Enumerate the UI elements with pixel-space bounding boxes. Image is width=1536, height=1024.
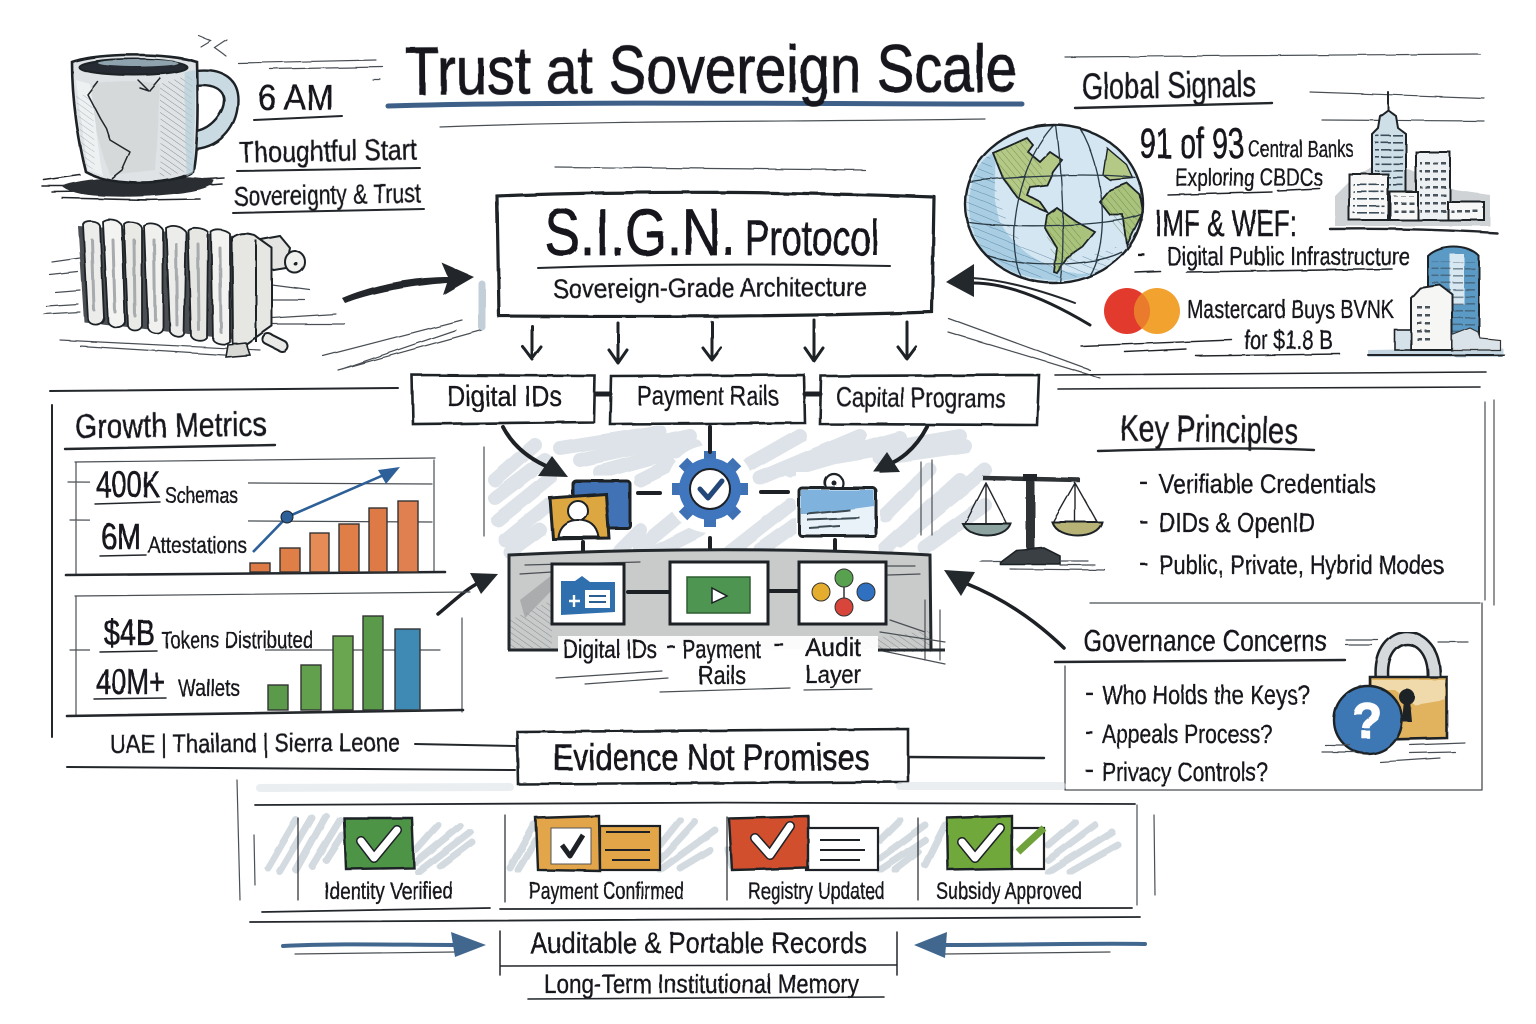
icon: radiator <box>44 220 345 357</box>
card: identity verified: Identity Verified <box>324 878 453 905</box>
list: concerns: - <box>1085 716 1094 746</box>
icon: mastercard logo <box>1104 288 1180 334</box>
icon: city skyline <box>1330 92 1497 233</box>
heading: governance concerns: Governance Concerns <box>1083 623 1327 658</box>
box: Digital IDs <box>412 375 595 424</box>
heading: global signals: Global Signals <box>1082 64 1256 107</box>
card: registry updated: Registry Updated <box>748 878 885 905</box>
heading: S.I.G.N. Protocol: Protocol <box>745 210 879 266</box>
text: IMF and WEF <box>1135 203 1410 272</box>
text: IMF and WEF: Digital Public Infrastructure <box>1167 241 1410 271</box>
thin verticals around central icons <box>484 447 932 536</box>
chart: tokens and wallets <box>67 592 470 716</box>
list: principles <box>1139 466 1444 580</box>
decorative wash under evidence <box>260 786 1062 788</box>
panel: key principles <box>963 372 1494 605</box>
labels: architecture layer: Audit <box>805 632 862 662</box>
arrow: radiator to protocol <box>342 263 474 303</box>
heading: evidence not promises <box>517 729 1044 784</box>
connector strokes around central icons <box>583 427 835 555</box>
list: concerns: Appeals Process? <box>1102 719 1272 749</box>
card: payment confirmed <box>505 815 715 905</box>
list: principles: - <box>1139 505 1148 535</box>
list: concerns <box>1085 677 1310 787</box>
text: mastercard buys BVNK: for $1.8 B <box>1244 325 1333 355</box>
chart: schemas and attestations: Attestations <box>148 532 247 558</box>
text: thoughtful start: Thoughtful Start <box>239 133 418 170</box>
chart: schemas and attestations: Schemas <box>165 482 238 508</box>
icon: padlock with question mark <box>1322 638 1468 762</box>
heading: S.I.G.N. Protocol: S.I.G.N. <box>544 195 736 269</box>
list: principles: Verifiable Credentials <box>1159 469 1376 499</box>
icon: blue gear with check <box>666 445 754 533</box>
chart: tokens and wallets: $4B <box>104 612 155 653</box>
list: principles: - <box>1139 466 1148 496</box>
labels: architecture layer: Digital IDs <box>563 634 657 664</box>
icon: padlock with question mark: ? <box>1352 693 1382 749</box>
list: principles: DIDs & OpenID <box>1159 507 1315 538</box>
card: audit layer <box>799 562 886 624</box>
text: mastercard buys BVNK <box>1081 294 1394 356</box>
connector strokes between pillars <box>596 392 820 396</box>
heading: growth metrics: Growth Metrics <box>75 406 267 446</box>
panel: growth metrics <box>50 388 515 770</box>
box: Capital Programs <box>820 375 1039 425</box>
footer: institutional memory: Long-Term Institutional Memory <box>544 969 859 999</box>
box: Digital IDs: Digital IDs <box>447 381 562 413</box>
chart: schemas and attestations: 400K <box>96 464 160 505</box>
list: concerns: - <box>1085 677 1094 707</box>
card: registry updated <box>727 816 925 905</box>
title <box>388 30 1022 127</box>
decorative strokes under protocol arrows <box>323 284 1100 378</box>
card: payment rails <box>670 562 768 624</box>
chart: tokens and wallets: Tokens Distributed <box>161 627 313 654</box>
labels: architecture layer: Payment <box>682 634 762 664</box>
text: mastercard buys BVNK: Mastercard Buys BVNK <box>1187 294 1394 324</box>
text: sovereignty and trust: Sovereignty & Trust <box>234 177 421 212</box>
text: central banks <box>1140 120 1354 195</box>
arrow: concerns to architecture <box>944 570 1064 648</box>
card: digital IDs <box>552 564 624 624</box>
heading: evidence not promises: Evidence Not Promises <box>553 737 870 778</box>
box: Payment Rails <box>610 375 805 424</box>
panel: governance concerns <box>1055 603 1482 790</box>
arrows: protocol down to pillars <box>523 320 916 363</box>
labels: architecture layer <box>556 628 878 696</box>
arrow: metrics to architecture <box>438 573 498 614</box>
icon: balance scale <box>963 474 1105 570</box>
arrow: globe to protocol <box>946 264 1090 325</box>
arrow: digital ids to icon <box>503 427 568 477</box>
text: central banks: Central Banks <box>1248 136 1354 163</box>
arrow: blue left <box>283 932 486 957</box>
text: countries: UAE | Thailand | Sierra Leone <box>110 727 400 759</box>
card: subsidy approved <box>918 816 1118 905</box>
text: 6 AM: 6 AM <box>258 77 334 118</box>
text: central banks: 91 of 93 <box>1140 120 1244 168</box>
list: concerns: Privacy Controls? <box>1102 757 1268 787</box>
text: IMF and WEF: - <box>1137 238 1146 268</box>
list: principles: - <box>1139 547 1148 577</box>
list: principles: Public, Private, Hybrid Modes <box>1159 550 1444 580</box>
list: concerns: Who Holds the Keys? <box>1102 680 1310 710</box>
text: sovereign-grade architecture: Sovereign-Grade Architecture <box>553 272 867 304</box>
icon: bank buildings <box>1368 247 1504 357</box>
heading: key principles: Key Principles <box>1120 407 1298 452</box>
text: auditable records: Auditable & Portable Records <box>530 927 867 960</box>
card: subsidy approved: Subsidy Approved <box>936 878 1082 905</box>
card: identity verified <box>268 816 472 905</box>
text: central banks: Exploring CBDCs <box>1175 164 1323 192</box>
labels: architecture layer: - <box>666 630 676 660</box>
labels: architecture layer: - <box>773 628 785 658</box>
box: Payment Rails: Payment Rails <box>637 380 779 411</box>
icon: globe <box>965 125 1143 283</box>
icon: coffee mug <box>42 36 238 200</box>
card: payment confirmed: Payment Confirmed <box>529 878 684 905</box>
icon: badge <box>796 472 880 540</box>
panel: architecture layer <box>508 550 945 664</box>
labels: architecture layer: Layer <box>805 659 861 689</box>
title: Trust at Sovereign Scale <box>405 30 1017 110</box>
labels: architecture layer: Rails <box>698 660 746 690</box>
panel: evidence cards <box>237 780 1155 922</box>
text: IMF and WEF: IMF & WEF: <box>1155 203 1297 244</box>
icon: identity cards <box>550 476 634 539</box>
decorative top strokes <box>238 54 1484 170</box>
footer: records <box>500 927 897 975</box>
chart: schemas and attestations <box>66 458 445 575</box>
arrow: capital programs to icon <box>872 427 927 473</box>
arrow: blue right <box>914 932 1145 958</box>
box: Capital Programs: Capital Programs <box>836 381 1006 414</box>
wash behind central architecture <box>495 432 985 555</box>
list: concerns: - <box>1085 754 1094 784</box>
chart: tokens and wallets: 40M+ <box>96 661 165 702</box>
chart: tokens and wallets: Wallets <box>178 675 240 702</box>
chart: schemas and attestations: 6M <box>101 516 141 557</box>
panel: S.I.G.N. Protocol <box>497 192 934 317</box>
